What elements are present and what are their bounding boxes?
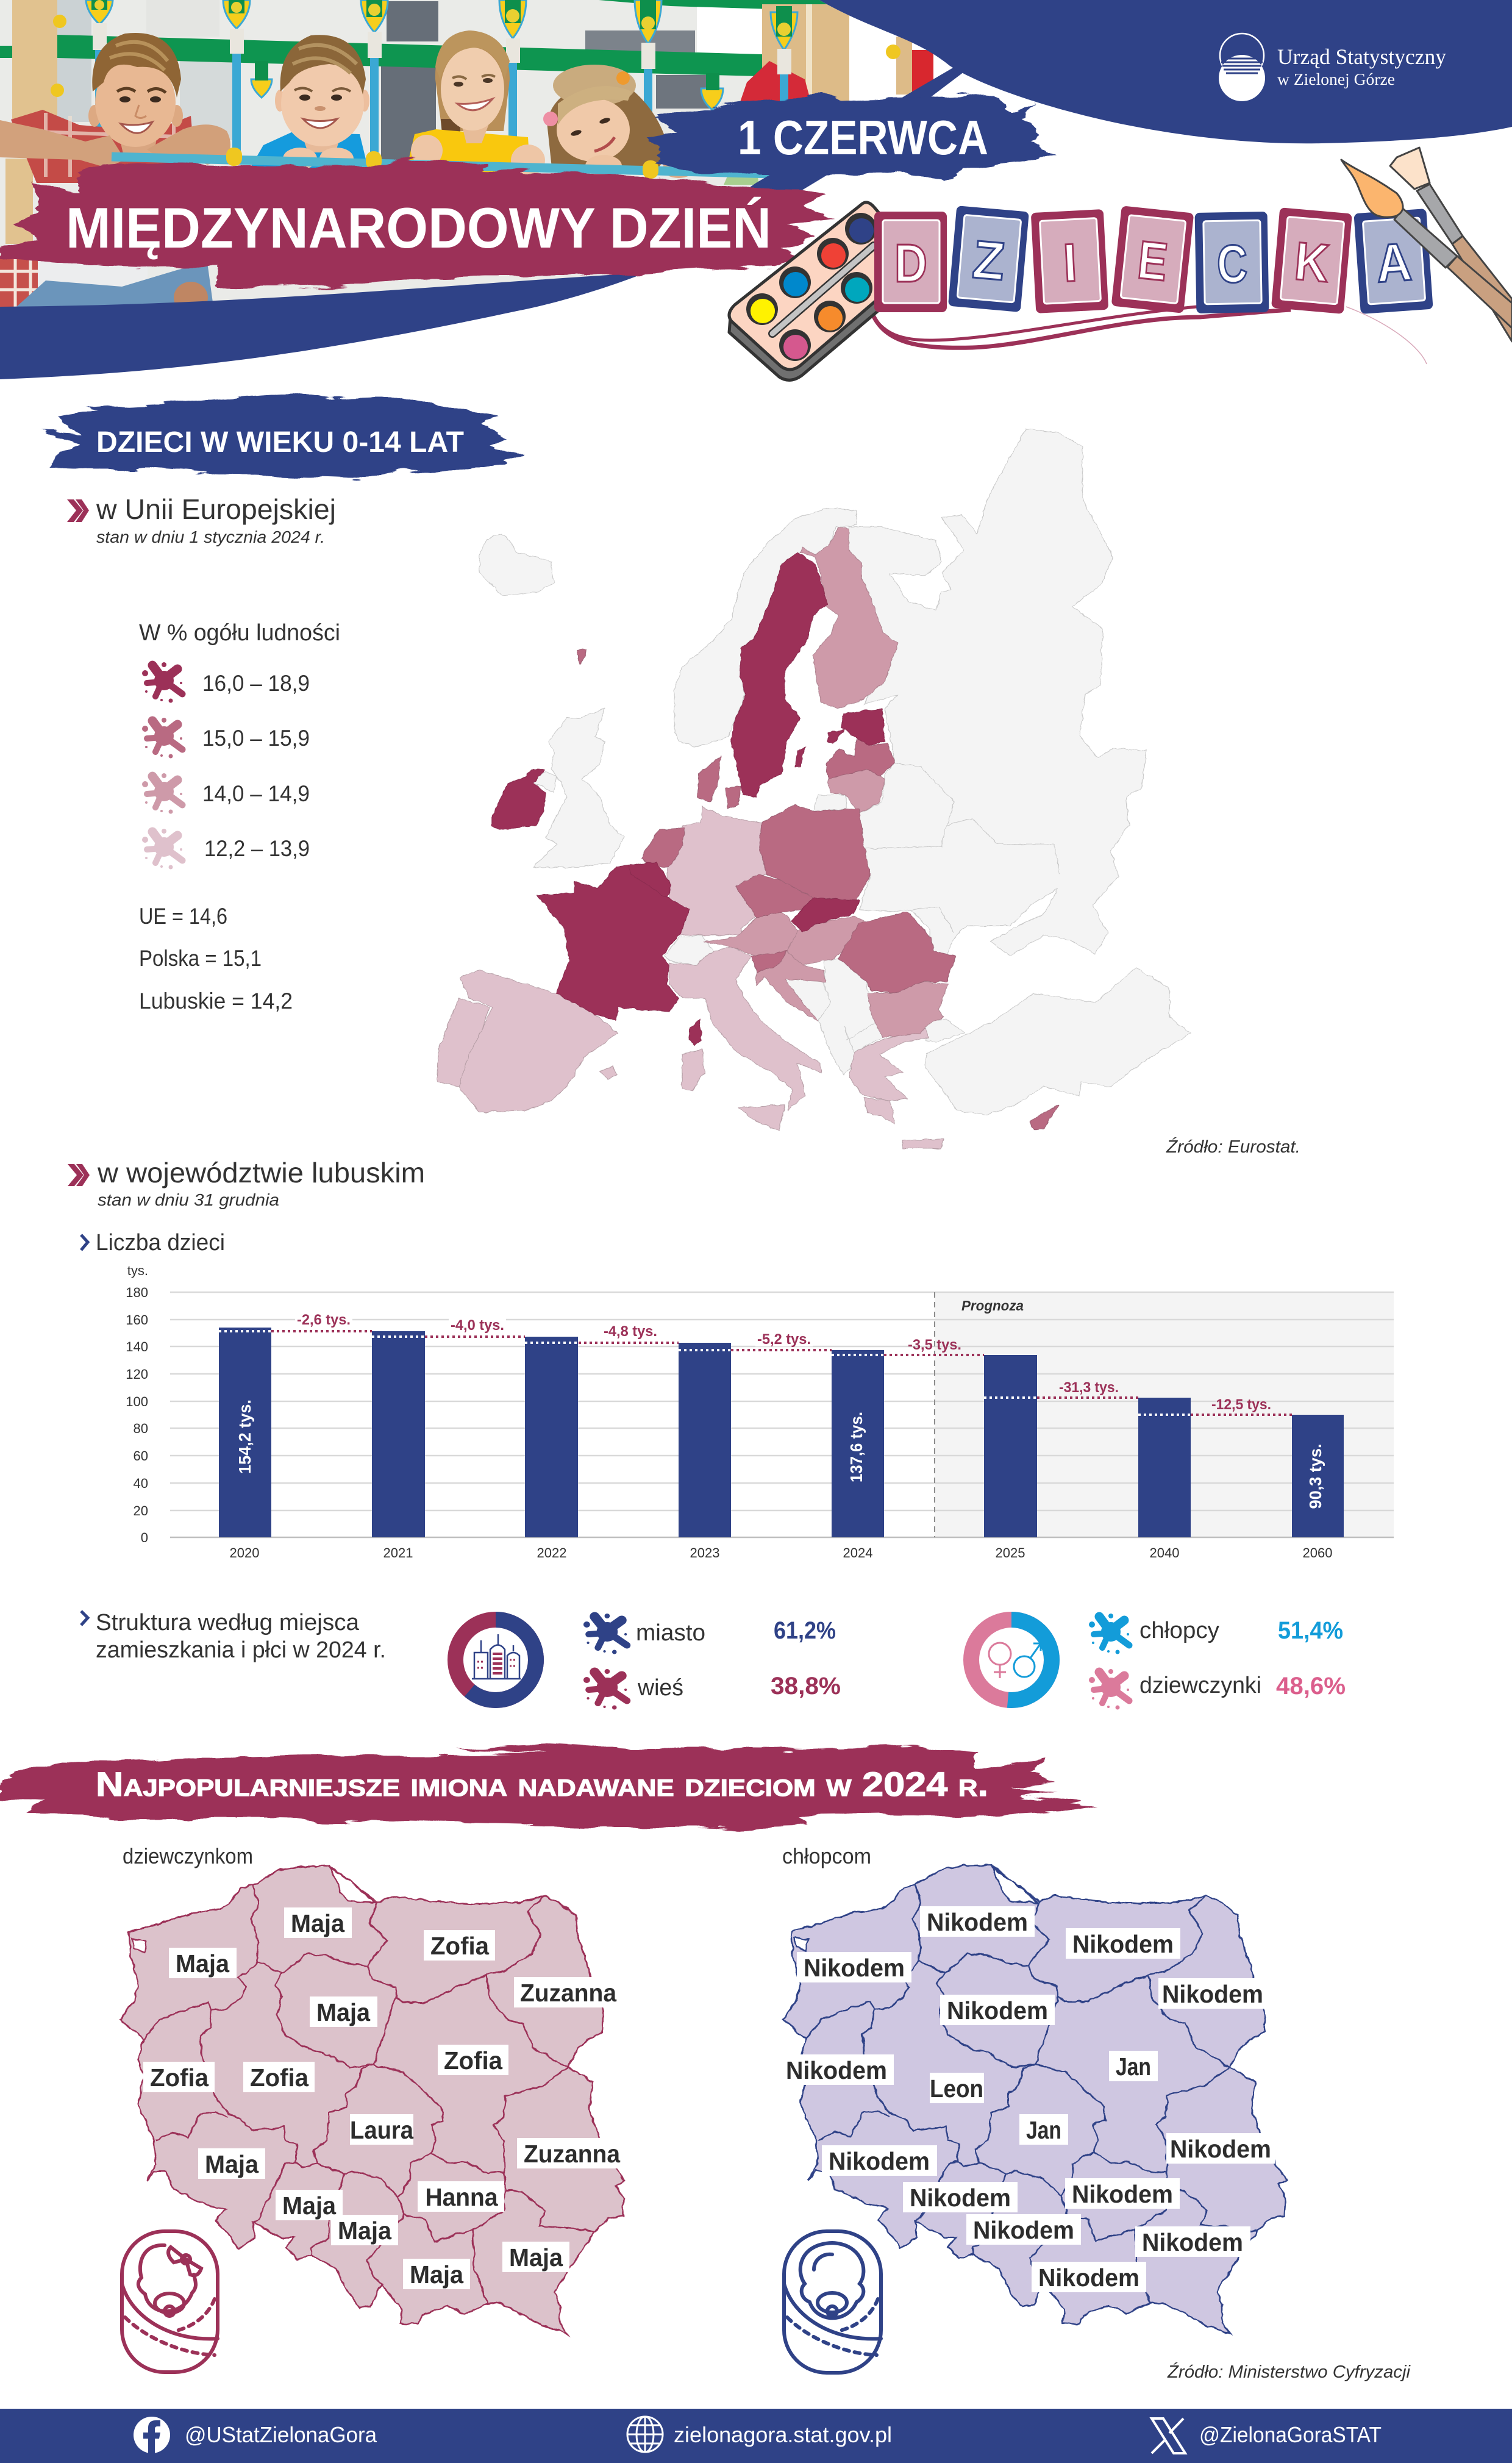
icon: chevrons — [68, 1164, 90, 1186]
name labels: Maja — [316, 1998, 371, 2026]
name labels: Nikodem — [1170, 2135, 1271, 2163]
logo — [1219, 34, 1446, 101]
name labels: Maja — [338, 2217, 392, 2245]
structure description: zamieszkania i płci w 2024 r. — [96, 1637, 386, 1663]
change connectors — [219, 1331, 1292, 1415]
bar value labels: 137,6 tys. — [847, 1412, 866, 1482]
orange brush — [1447, 256, 1512, 328]
name labels: Zofia — [444, 2047, 503, 2075]
y axis labels: 60 — [134, 1448, 148, 1464]
block A: A — [1374, 231, 1414, 294]
key values: Lubuskie = 14,2 — [139, 988, 293, 1013]
child 4 — [543, 65, 694, 178]
map label: girls: dziewczynkom — [123, 1843, 253, 1868]
legend: boys: chłopcy — [1139, 1618, 1219, 1643]
forecast label: Prognoza — [961, 1298, 1024, 1314]
blue lower curve — [0, 67, 964, 379]
icon: baby boy — [784, 2231, 881, 2373]
cream brush — [1452, 236, 1512, 341]
date text: 1 CZERWCA — [738, 110, 988, 165]
chart title: Liczba dzieci — [96, 1230, 225, 1256]
forecast area — [935, 1292, 1394, 1537]
EU share 15,0-15,9 — [577, 649, 1060, 1130]
block E: E — [1135, 229, 1171, 292]
legend item 16,0-18,9: 16,0 – 18,9 — [202, 671, 310, 696]
change labels — [295, 1311, 1271, 1413]
x axis labels: 2023 — [690, 1545, 719, 1560]
EU share 12,2-13,9 — [437, 807, 944, 1148]
legend: boys — [1089, 1614, 1343, 1654]
donut: sex — [971, 1620, 1052, 1700]
date note: stan w dniu 1 stycznia 2024 r. — [96, 527, 325, 546]
block K: K — [1293, 231, 1332, 293]
icon: paint palette — [729, 202, 921, 380]
name labels: Nikodem — [1072, 1930, 1174, 1958]
x axis labels: 2024 — [843, 1545, 872, 1560]
legend: boys: 51,4% — [1278, 1617, 1343, 1644]
legend item 14,0-14,9: 14,0 – 14,9 — [202, 781, 310, 806]
header banner — [0, 0, 1512, 380]
block K — [1271, 207, 1352, 314]
x axis labels: 2022 — [537, 1545, 566, 1560]
x axis labels: 2060 — [1303, 1545, 1332, 1560]
legend item 14,0-14,9 — [142, 773, 310, 813]
name labels: Nikodem — [1162, 1980, 1263, 2008]
bar value labels: 154,2 tys. — [235, 1400, 254, 1474]
icon: baby girl — [122, 2231, 218, 2372]
name labels: Zofia — [150, 2064, 209, 2092]
bar value labels: 90,3 tys. — [1306, 1444, 1325, 1509]
subheading: EU — [67, 493, 336, 546]
icon: paint brushes — [1341, 148, 1512, 341]
name labels: Nikodem — [927, 1908, 1028, 1936]
legend: village: wieś — [637, 1675, 683, 1701]
website: zielonagora.stat.gov.pl — [674, 2422, 892, 2447]
name labels: Nikodem — [1072, 2180, 1173, 2208]
name labels: Nikodem — [1142, 2228, 1243, 2256]
change labels: -4,0 tys. — [451, 1317, 504, 1334]
legend: girls: dziewczynki — [1139, 1673, 1261, 1698]
y axis labels: 20 — [134, 1503, 148, 1518]
structure description — [81, 1610, 386, 1663]
name labels: Maja — [282, 2192, 337, 2220]
map of Europe — [437, 429, 1190, 1148]
name labels: Jan — [1026, 2116, 1061, 2144]
national borders — [818, 762, 1060, 1052]
key values — [139, 904, 293, 1013]
block E — [1111, 206, 1194, 313]
key values: Polska = 15,1 — [139, 946, 262, 971]
date note: stan w dniu 31 grudnia — [98, 1190, 279, 1209]
clips on ropes — [86, 0, 797, 110]
y axis labels: 140 — [126, 1339, 148, 1354]
y axis labels: 0 — [141, 1530, 148, 1545]
legend title: W % ogółu ludności — [139, 620, 340, 646]
icon: gender symbols — [989, 1643, 1041, 1678]
block C: C — [1216, 234, 1248, 294]
name labels: Nikodem — [829, 2147, 930, 2175]
name labels: Laura — [350, 2116, 414, 2144]
ribbon — [869, 307, 1427, 364]
legend item 12,2-13,9 — [142, 829, 310, 870]
maroon brush stroke: title — [0, 157, 834, 288]
change labels: -5,2 tys. — [757, 1331, 811, 1348]
subheading: Lubuskie — [68, 1157, 425, 1209]
legend: town: miasto — [636, 1620, 705, 1646]
legend: share of population — [139, 620, 340, 870]
change labels: -12,5 tys. — [1211, 1396, 1271, 1413]
x axis labels: 2021 — [383, 1545, 413, 1560]
map: names for boys — [779, 1865, 1287, 2334]
icon: buildings — [472, 1634, 521, 1679]
child 1 — [0, 33, 230, 313]
name labels: Maja — [291, 1909, 345, 1937]
X handle: @ZielonaGoraSTAT — [1199, 2422, 1382, 2447]
name labels: Nikodem — [947, 1996, 1048, 2025]
name labels: Leon — [930, 2075, 983, 2103]
name labels: Zofia — [250, 2064, 309, 2092]
name labels: Nikodem — [973, 2216, 1074, 2244]
facebook handle: @UStatZielonaGora — [185, 2422, 377, 2447]
name labels: Nikodem — [910, 2184, 1011, 2212]
name labels: Jan — [1116, 2053, 1151, 2081]
y axis labels: 40 — [134, 1476, 148, 1491]
bars — [219, 1328, 1344, 1537]
blue brush stroke: date — [646, 92, 1056, 179]
child 3 — [405, 30, 545, 177]
change labels: -3,5 tys. — [908, 1337, 961, 1353]
name labels: Zuzanna — [524, 2140, 621, 2168]
section heading: popular names — [0, 1743, 1097, 1829]
y axis labels — [126, 1263, 148, 1545]
block D — [874, 212, 947, 312]
name labels: Hanna — [426, 2183, 499, 2211]
legend: town: 61,2% — [774, 1617, 836, 1644]
key values: UE = 14,6 — [139, 904, 227, 929]
block Z — [948, 206, 1029, 312]
block I — [1031, 209, 1108, 313]
legend item 12,2-13,9: 12,2 – 13,9 — [204, 836, 310, 861]
legend: girls: 48,6% — [1276, 1673, 1346, 1700]
x axis labels: 2020 — [230, 1545, 259, 1560]
child 2 — [251, 35, 369, 168]
name labels: Maja — [509, 2243, 563, 2272]
name labels: Zofia — [430, 1932, 490, 1960]
section heading: children aged 0-14 — [40, 393, 523, 479]
subheading text: w Unii Europejskiej — [96, 493, 336, 525]
voivodeship map — [121, 1865, 625, 2334]
subheading text: w województwie lubuskim — [97, 1157, 425, 1189]
x axis labels — [230, 1545, 1332, 1560]
heading text: Najpopularniejsze imiona nadawane dzieciom w 2024 r. — [96, 1765, 988, 1803]
bar value labels — [235, 1400, 1325, 1509]
change labels: -4,8 tys. — [604, 1323, 657, 1340]
x axis labels: 2025 — [996, 1545, 1025, 1560]
icon: chevrons — [67, 499, 89, 522]
heading text: DZIECI W WIEKU 0-14 LAT — [96, 426, 464, 459]
block Z: Z — [971, 229, 1007, 291]
rope and knobs — [112, 148, 773, 185]
y axis labels: 180 — [126, 1285, 148, 1300]
x axis labels: 2040 — [1150, 1545, 1179, 1560]
name labels: Maja — [176, 1950, 230, 1978]
block A — [1353, 209, 1433, 314]
name labels: Zuzanna — [520, 1979, 617, 2007]
map label: boys: chłopcom — [782, 1843, 871, 1868]
y axis labels: 120 — [126, 1367, 148, 1382]
footer — [0, 2409, 1512, 2463]
legend: village: 38,8% — [771, 1673, 841, 1700]
icon: X — [1152, 2418, 1185, 2453]
change labels: -31,3 tys. — [1059, 1379, 1119, 1396]
legend: village — [583, 1669, 841, 1710]
name labels: Maja — [410, 2261, 464, 2289]
bar chart: number of children — [126, 1263, 1394, 1560]
block D: D — [894, 233, 927, 293]
name labels: Maja — [205, 2150, 259, 2178]
donut: place of residence — [455, 1620, 536, 1700]
icon: globe — [627, 2417, 663, 2452]
block I: I — [1062, 232, 1079, 293]
name labels: Nikodem — [1038, 2264, 1139, 2292]
name labels — [143, 1907, 626, 2289]
structure description: Struktura według miejsca — [96, 1610, 360, 1635]
letter blocks: DZIECKA — [874, 206, 1433, 314]
y axis labels: 80 — [134, 1421, 148, 1436]
legend: girls — [1089, 1669, 1346, 1710]
legend item 15,0-15,9 — [142, 718, 310, 759]
EU share 14,0-14,9 — [704, 527, 948, 1038]
title text: MIĘDZYNARODOWY DZIEŃ — [66, 196, 771, 260]
logo: w Zielonej Górze — [1277, 70, 1395, 88]
legend item 16,0-18,9 — [142, 662, 310, 702]
voivodeship map — [783, 1865, 1287, 2334]
name labels: Nikodem — [786, 2056, 887, 2084]
EU share 16,0-18,9 — [492, 552, 885, 1046]
source: Eurostat: Źródło: Eurostat. — [1166, 1137, 1300, 1157]
icon: facebook — [134, 2417, 170, 2453]
blue top right curve — [819, 0, 1512, 143]
block C — [1195, 212, 1269, 313]
source: ministry: Źródło: Ministerstwo Cyfryzacji — [1167, 2362, 1411, 2382]
legend item 15,0-15,9: 15,0 – 15,9 — [202, 726, 310, 751]
photo of children — [0, 0, 975, 313]
logo: Urząd Statystyczny — [1277, 45, 1446, 69]
legend: town — [583, 1614, 836, 1654]
y axis labels: tys. — [127, 1263, 148, 1278]
y axis labels: 100 — [126, 1394, 148, 1409]
change labels: -2,6 tys. — [297, 1312, 351, 1328]
name labels — [779, 1906, 1275, 2292]
non-EU countries — [479, 429, 1190, 1115]
map: names for girls — [121, 1865, 626, 2334]
y axis labels: 160 — [126, 1312, 148, 1328]
name labels: Nikodem — [804, 1954, 905, 1982]
